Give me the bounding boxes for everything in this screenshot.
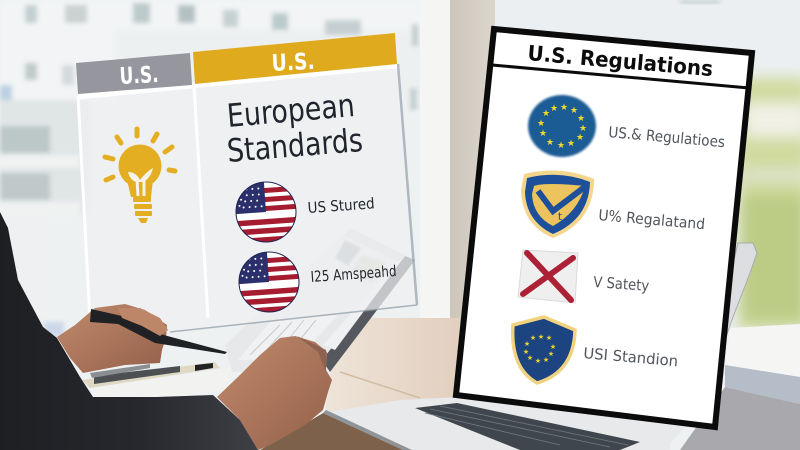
panel: translucent left chart	[76, 33, 417, 332]
laptop	[323, 243, 757, 450]
label: US.& Regulatioes: US.& Regulatioes	[608, 123, 726, 151]
label: U% Regalatand: U% Regalatand	[598, 206, 706, 233]
icon: EU circle: ★	[546, 138, 554, 148]
icon: EU circle: ★	[570, 106, 578, 116]
tablet and papers	[225, 228, 415, 372]
header: gray column: U.S.	[119, 62, 159, 90]
right window and greenery	[495, 0, 800, 330]
header: gray column	[76, 53, 192, 94]
desk	[260, 318, 800, 450]
decorative white lines	[78, 66, 397, 320]
icon: EU shield: ★	[535, 357, 541, 365]
icon: EU circle: ★	[560, 103, 568, 113]
icon: US flag 2	[238, 252, 300, 312]
window pillar	[420, 0, 495, 326]
icon: EU circle: ★	[537, 119, 545, 129]
label: I25 Amspeahd: I25 Amspeahd	[310, 262, 397, 286]
icon: EU shield: ★	[523, 348, 529, 356]
left hand	[57, 304, 167, 373]
keyboard and notebook	[82, 362, 230, 400]
icon: EU circle: ★	[567, 139, 575, 149]
panel: U.S. Regulations poster	[456, 29, 752, 427]
heading: European Standards: European	[225, 86, 356, 135]
icon: EU shield: ★	[538, 333, 544, 341]
heading: U.S. Regulations: U.S. Regulations	[527, 41, 714, 81]
icon: EU circle: ★	[557, 141, 565, 151]
icon: US flag 1	[236, 182, 296, 242]
icon: EU shield: ★	[527, 354, 533, 362]
icon: EU shield: ★	[543, 356, 549, 364]
jacket	[0, 212, 258, 450]
person	[0, 212, 332, 450]
icon: EU circle: ★	[539, 129, 547, 139]
icon: EU shield: ★	[548, 350, 554, 358]
heading: European Standards	[225, 86, 364, 170]
icon: EU circle	[528, 95, 596, 157]
label: USI Standion: USI Standion	[583, 344, 679, 370]
icon: EU shield: ★	[546, 334, 552, 342]
icon: EU circle: ★	[577, 114, 585, 124]
icon: EU shield	[513, 317, 575, 383]
icon: EU shield: ★	[550, 343, 556, 351]
right hand	[217, 336, 332, 450]
icon: red X flag	[518, 250, 578, 303]
icon: EU circle: ★	[576, 133, 584, 143]
icon: EU circle: ★	[550, 104, 558, 114]
header: gold column: U.S.	[271, 49, 315, 77]
icon: gold shield with check: t	[558, 210, 563, 223]
pen	[90, 309, 227, 354]
icon: EU circle: ★	[542, 109, 550, 119]
left thumb	[118, 308, 168, 336]
icon: EU shield: ★	[524, 340, 530, 348]
icon: EU shield: ★	[530, 334, 536, 342]
icon: EU circle: ★	[579, 124, 587, 134]
label: US Stured: US Stured	[307, 194, 375, 217]
heading: European Standards: Standards	[226, 121, 364, 170]
header: gold column	[193, 33, 397, 84]
icon: light bulb	[105, 129, 175, 223]
label: V Satety: V Satety	[593, 273, 650, 295]
icon: gold shield with check	[521, 170, 594, 238]
